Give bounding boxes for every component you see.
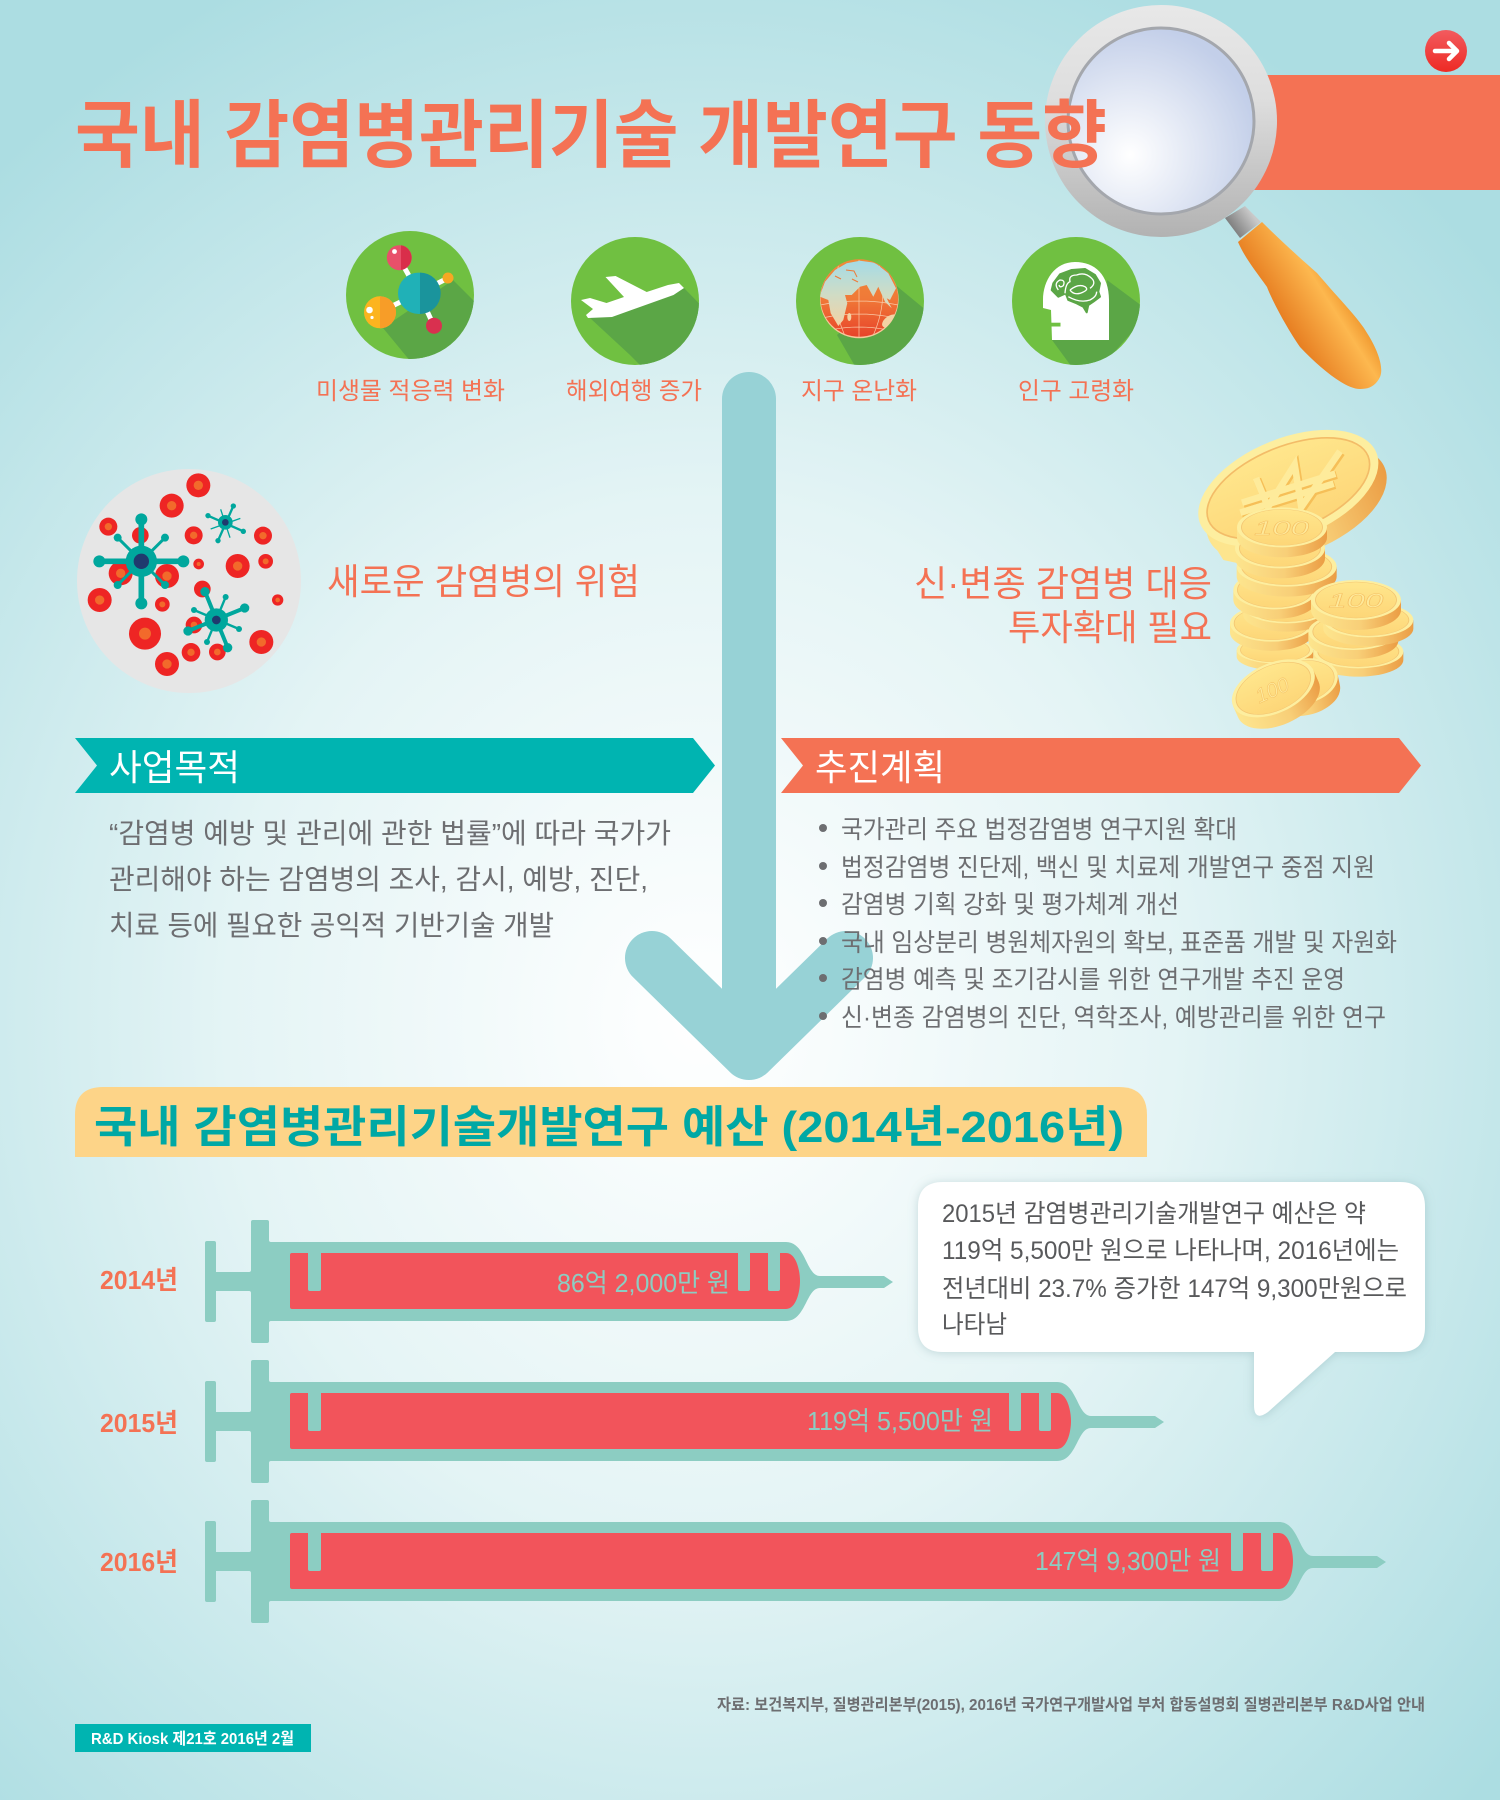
text: new infectious disease risk: 새로운 감염병의 위험 — [327, 561, 640, 602]
icon: coins — [1182, 406, 1413, 740]
label: 인구 고령화 — [1018, 378, 1134, 405]
orange header band — [1230, 75, 1500, 190]
bullet list: 신·변종 감염병의 진단, 역학조사, 예방관리를 위한 연구 — [841, 1004, 1386, 1032]
year label: 2016년 — [100, 1547, 178, 1577]
icon: magnifying glass — [1045, 5, 1381, 389]
icon: airplane — [571, 237, 699, 365]
label: 지구 온난화 — [801, 378, 917, 405]
text: investment needed — [914, 563, 1212, 648]
publication tag: R&D Kiosk 제21호 2016년 2월 — [91, 1730, 294, 1748]
icon: red arrow badge — [1425, 30, 1467, 72]
text: investment needed: 신·변종 감염병 대응 — [914, 563, 1212, 604]
publication tag — [75, 1724, 311, 1752]
icon: head with brain — [1012, 237, 1140, 365]
callout: 전년대비 23.7% 증가한 147억 9,300만원으로 — [942, 1275, 1407, 1303]
callout: 119억 5,500만 원으로 나타나며, 2016년에는 — [942, 1237, 1399, 1265]
heading banner: 사업목적 — [109, 747, 240, 788]
syringe — [205, 1360, 1164, 1483]
bullet list: 감염병 기획 강화 및 평가체계 개선 — [841, 891, 1179, 919]
body text — [109, 818, 671, 941]
callout: 2015년 감염병관리기술개발연구 예산은 약 — [942, 1200, 1366, 1228]
big arrow — [652, 399, 846, 1053]
cause: microbial adaptation — [316, 231, 505, 405]
syringe: 147억 9,300만 원 — [1035, 1546, 1221, 1576]
icon: molecule — [346, 231, 474, 359]
syringe: 86억 2,000만 원 — [557, 1268, 730, 1298]
panel: business purpose — [75, 738, 715, 941]
syringe: 119억 5,500만 원 — [807, 1406, 993, 1436]
bullet list: 국내 임상분리 병원체자원의 확보, 표준품 개발 및 자원화 — [841, 929, 1397, 957]
icon: coins: 100 — [1254, 517, 1310, 540]
label: 해외여행 증가 — [566, 378, 702, 405]
budget heading: 국내 감염병관리기술개발연구 예산 (2014년-2016년) — [94, 1103, 1124, 1152]
body text: “감염병 예방 및 관리에 관한 법률”에 따라 국가가 — [109, 818, 671, 849]
callout: 나타남 — [942, 1311, 1007, 1339]
callout — [918, 1182, 1425, 1416]
year label: 2014년 — [100, 1265, 178, 1295]
syringe chart: 2015 — [100, 1360, 1164, 1483]
label: 미생물 적응력 변화 — [316, 378, 505, 405]
bullet list: 법정감염병 진단제, 백신 및 치료제 개발연구 중점 지원 — [841, 854, 1375, 882]
icon: coins: 100 — [1328, 590, 1384, 613]
body text: 관리해야 하는 감염병의 조사, 감시, 예방, 진단, — [109, 864, 648, 895]
heading banner: 추진계획 — [815, 747, 945, 788]
syringe chart: 2014 — [100, 1220, 893, 1343]
icon: globe — [796, 237, 924, 365]
syringe — [205, 1220, 893, 1343]
syringe — [205, 1500, 1386, 1623]
icon: virus dish — [77, 469, 301, 693]
panel: promotion plan — [781, 738, 1421, 1032]
bullet list — [819, 816, 1397, 1032]
cause: overseas travel — [567, 237, 702, 402]
body text: 치료 등에 필요한 공익적 기반기술 개발 — [109, 910, 554, 941]
source note: 자료: 보건복지부, 질병관리본부(2015), 2016년 국가연구개발사업 부처 합동설명회 질병관리본부 R&D사업 안내 — [717, 1696, 1425, 1714]
heading banner — [781, 738, 1421, 793]
text: investment needed: 투자확대 필요 — [1008, 607, 1212, 648]
icon: coins: 100 — [1252, 673, 1293, 708]
title: 국내 감염병관리기술 개발연구 동향 — [75, 94, 1107, 177]
budget heading — [75, 1087, 1147, 1157]
cause: global warming — [796, 237, 924, 402]
heading banner — [75, 738, 715, 793]
cause: aging population — [1012, 237, 1150, 405]
year label: 2015년 — [100, 1408, 178, 1438]
bullet list: 국가관리 주요 법정감염병 연구지원 확대 — [841, 816, 1237, 844]
syringe chart: 2016 — [100, 1500, 1386, 1623]
bullet list: 감염병 예측 및 조기감시를 위한 연구개발 추진 운영 — [841, 966, 1345, 994]
